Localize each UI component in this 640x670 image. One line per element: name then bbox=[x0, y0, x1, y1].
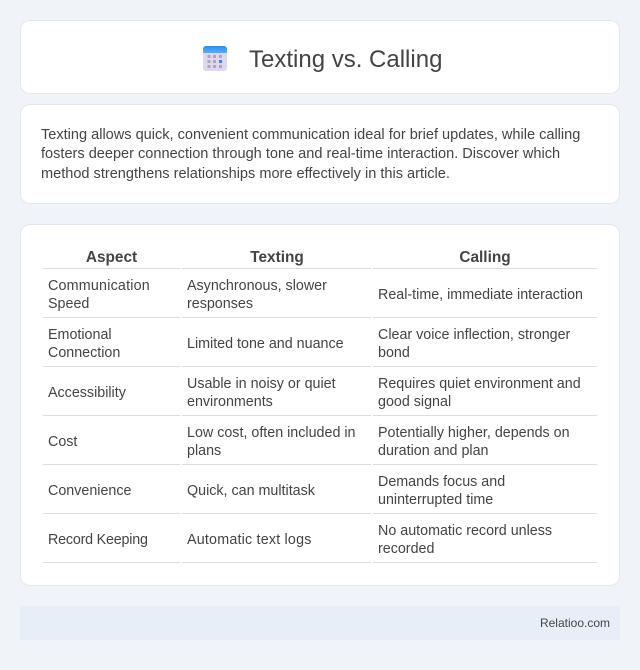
cell: calling accessibility bbox=[378, 376, 581, 410]
cell: calling cost bbox=[378, 425, 570, 459]
footer bar bbox=[20, 606, 620, 640]
cell: texting speed: Asynchronous, slower bbox=[187, 278, 327, 294]
cell: calling records bbox=[378, 523, 552, 557]
cell: calling accessibility: good signal bbox=[378, 394, 451, 410]
row: Accessibility: Accessibility bbox=[48, 385, 126, 401]
cell: calling emotion bbox=[378, 327, 570, 361]
cell: calling emotion: Clear voice inflection, stronger bbox=[378, 327, 570, 343]
row: Communication Speed: Communication bbox=[48, 278, 150, 294]
column heading: Calling: Calling bbox=[459, 249, 511, 266]
cell: texting speed bbox=[187, 278, 327, 312]
cell: calling cost: duration and plan bbox=[378, 443, 488, 459]
cell: calling records: No automatic record unless bbox=[378, 523, 552, 539]
cell: texting emotion: Limited tone and nuance bbox=[187, 336, 344, 352]
cell: texting cost bbox=[187, 425, 356, 459]
column heading: Aspect: Aspect bbox=[86, 249, 137, 266]
title: Texting vs. Calling bbox=[249, 46, 442, 73]
cell: calling speed: Real-time, immediate interaction bbox=[378, 287, 583, 303]
cell: texting records: Automatic text logs bbox=[187, 532, 312, 548]
cell: calling convenience: uninterrupted time bbox=[378, 492, 493, 508]
footer brand: Relatioo.com bbox=[540, 616, 610, 630]
row: Emotional Connection: Connection bbox=[48, 345, 120, 361]
cell: calling records: recorded bbox=[378, 541, 434, 557]
row: Emotional Connection bbox=[48, 327, 120, 361]
panel: introduction bbox=[20, 104, 620, 204]
panel: comparison table bbox=[20, 224, 620, 586]
row: Communication Speed: Speed bbox=[48, 296, 89, 312]
intro text bbox=[41, 126, 580, 182]
cell: calling cost: Potentially higher, depends on bbox=[378, 425, 570, 441]
intro text: Texting allows quick, convenient communication ideal for brief updates, while calling bbox=[41, 126, 580, 142]
row: Emotional Connection: Emotional bbox=[48, 327, 112, 343]
cell: texting cost: plans bbox=[187, 443, 221, 459]
row: Convenience: Convenience bbox=[48, 483, 131, 499]
cell: calling emotion: bond bbox=[378, 345, 410, 361]
cell: calling convenience: Demands focus and bbox=[378, 474, 505, 490]
cell: texting cost: Low cost, often included in bbox=[187, 425, 356, 441]
cell: calling convenience bbox=[378, 474, 505, 508]
row: Cost: Cost bbox=[48, 434, 77, 450]
column heading: Texting: Texting bbox=[250, 249, 304, 266]
icon: calendar bbox=[203, 46, 227, 71]
row: Record Keeping: Record Keeping bbox=[48, 532, 148, 548]
intro text: fosters deeper connection through tone and real-time interaction. Discover which bbox=[41, 146, 560, 162]
panel: title card bbox=[20, 20, 620, 94]
row: Communication Speed bbox=[48, 278, 150, 312]
cell: texting convenience: Quick, can multitask bbox=[187, 483, 315, 499]
cell: texting accessibility bbox=[187, 376, 336, 410]
cell: texting accessibility: environments bbox=[187, 394, 273, 410]
cell: texting speed: responses bbox=[187, 296, 253, 312]
cell: calling accessibility: Requires quiet environment and bbox=[378, 376, 581, 392]
cell: texting accessibility: Usable in noisy or quiet bbox=[187, 376, 336, 392]
intro text: method strengthens relationships more effectively in this article. bbox=[41, 166, 450, 182]
